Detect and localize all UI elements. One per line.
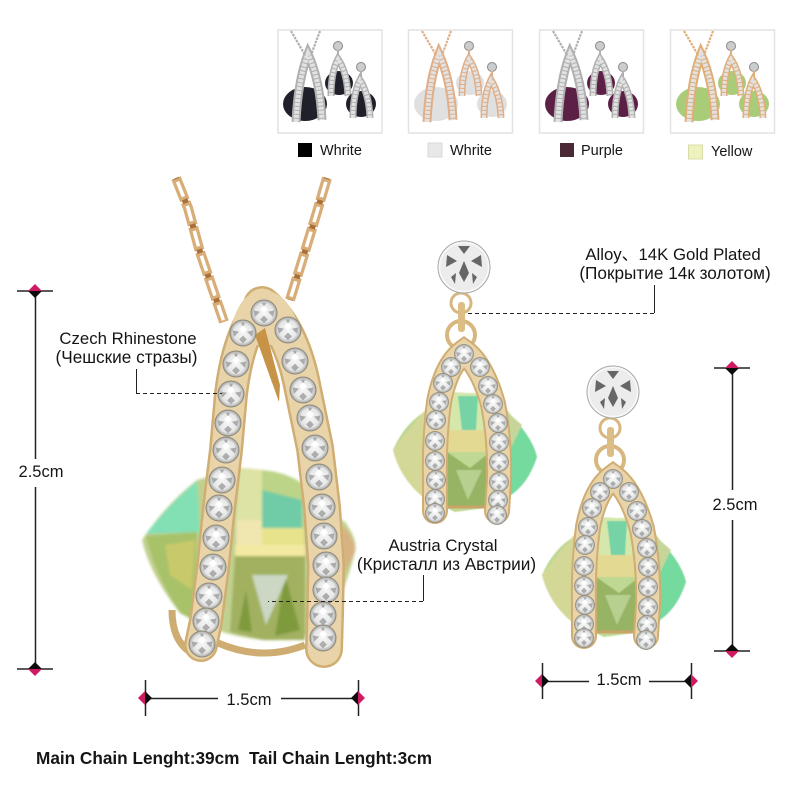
- legend: white Whrite: Whrite: [450, 143, 492, 159]
- legend: purple: [560, 143, 623, 159]
- legend: purple: Purple: [581, 143, 623, 159]
- legend: white Whrite: [428, 143, 492, 159]
- dimension: necklace width 1.5cm: 1.5cm: [227, 691, 271, 709]
- dimension: necklace height 2.5cm: 2.5cm: [19, 463, 63, 481]
- callout: Austria Crystal: (Кристалл из Австрии): [357, 554, 536, 574]
- thumbnail: yellow set: [670, 30, 774, 133]
- dimension: earring width 1.5cm: 1.5cm: [597, 671, 641, 689]
- callout: Alloy: Alloy、14K Gold Plated: [585, 245, 761, 264]
- arch apex: [232, 290, 298, 345]
- dimension: necklace height 2.5cm: [17, 284, 63, 676]
- earring: right: [542, 366, 686, 650]
- legend: black Whrite: [298, 143, 362, 159]
- legend: yellow: Yellow: [711, 144, 753, 160]
- rhinestones: [189, 300, 339, 657]
- dimension: earring height 2.5cm: 2.5cm: [713, 496, 757, 514]
- callout: Austria Crystal: [268, 536, 536, 602]
- thumbnail: black set: [278, 30, 382, 133]
- callout: Czech Rhinestone: (Чешские стразы): [56, 347, 197, 367]
- chain: [176, 178, 327, 322]
- thumbnail: white set: [408, 30, 512, 133]
- dimension: earring width 1.5cm: [535, 663, 698, 699]
- callout: Czech Rhinestone: [56, 329, 222, 394]
- crystal: [142, 468, 356, 640]
- earring: left: [393, 241, 537, 524]
- legend: black Whrite: Whrite: [320, 143, 362, 159]
- callout: Alloy: (Покрытие 14к золотом): [579, 263, 771, 283]
- thumbnail: purple set: [540, 30, 644, 133]
- necklace pendant: [142, 178, 356, 657]
- dimension: necklace width 1.5cm: [138, 680, 365, 716]
- callout: Alloy: [465, 245, 771, 314]
- callout: Czech Rhinestone: Czech Rhinestone: [59, 329, 197, 348]
- metal arch: [201, 305, 326, 649]
- dimension: earring height 2.5cm: [713, 361, 757, 658]
- callout: Austria Crystal: Austria Crystal: [388, 536, 498, 555]
- behind band: [172, 610, 305, 653]
- legend: yellow: [688, 144, 753, 160]
- chain length note: Main Chain Lenght:39cm Tail Chain Lenght:3cm: [36, 748, 432, 768]
